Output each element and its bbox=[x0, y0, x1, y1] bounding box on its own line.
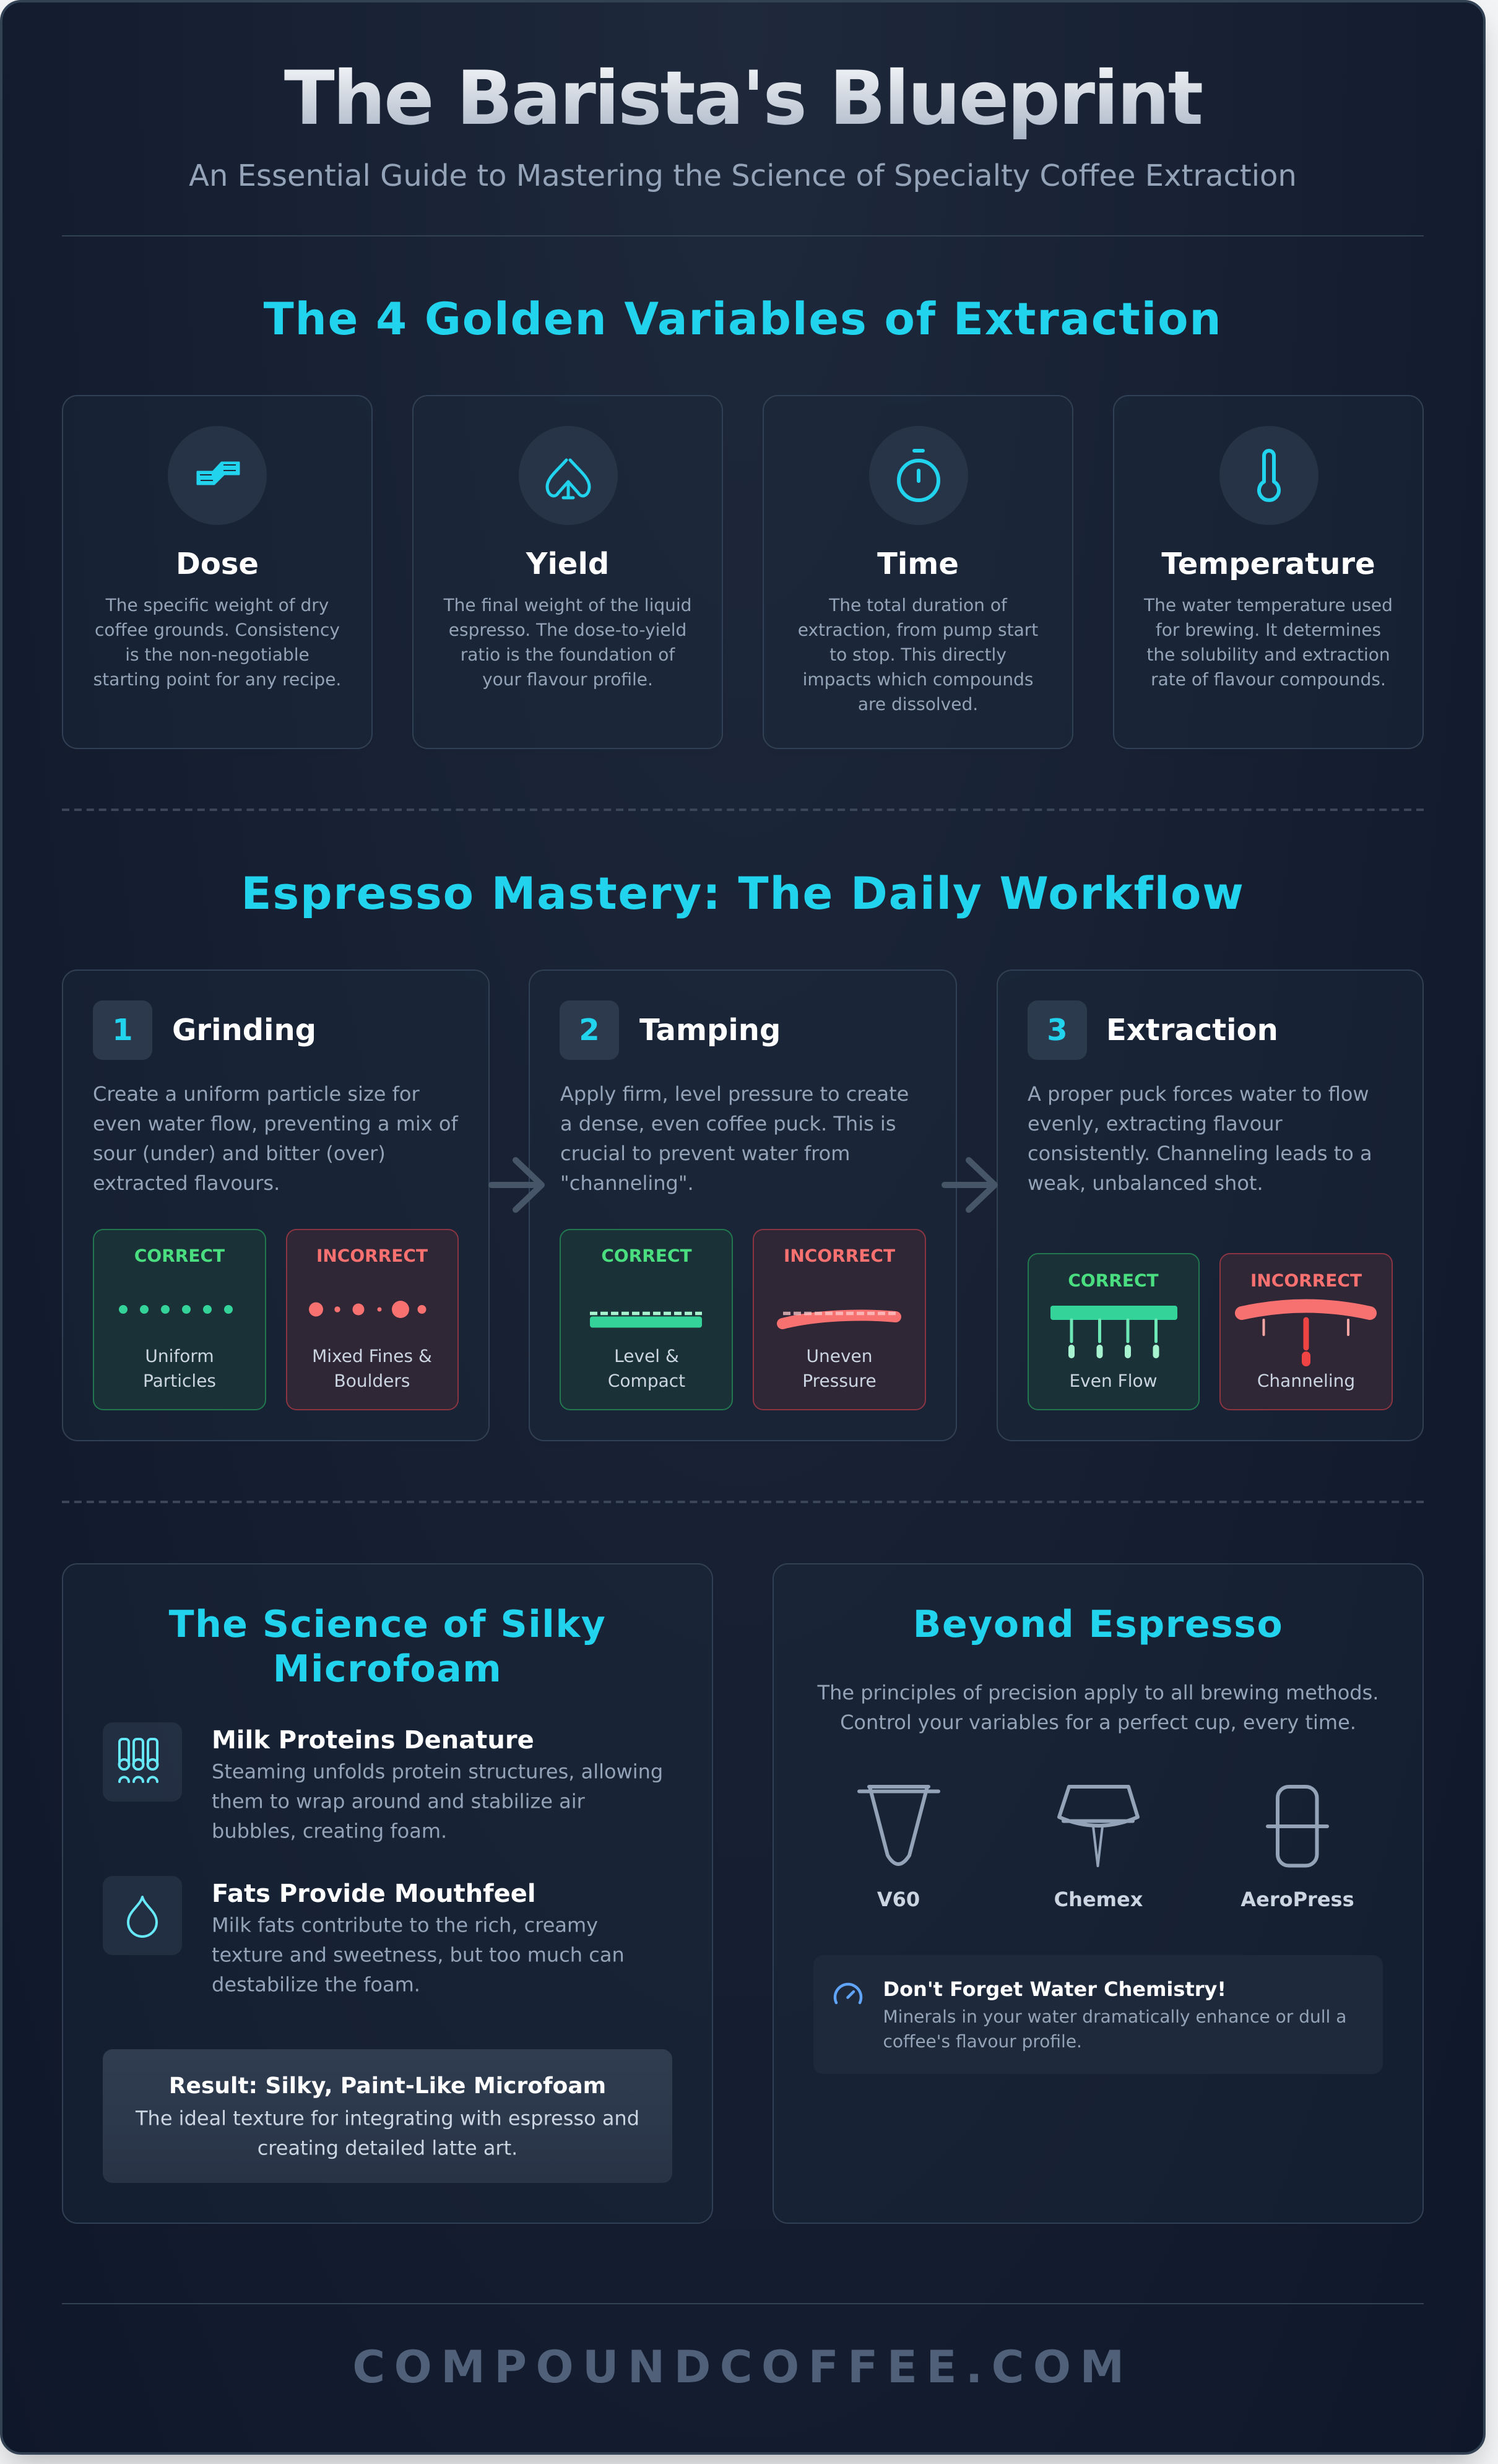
icon: stopwatch bbox=[899, 451, 938, 500]
panel: step 2 tamping bbox=[529, 970, 956, 1441]
text: grinding description: extracted flavours. bbox=[93, 1171, 280, 1195]
item: milk fats: Milk fats contribute to the rich, creamy bbox=[212, 1913, 598, 1937]
icon: Chemex bbox=[1054, 1787, 1143, 1911]
correct: uniform particles: CORRECT bbox=[134, 1246, 225, 1266]
correct: uniform particles: Particles bbox=[143, 1371, 216, 1391]
correct: level and compact: Compact bbox=[608, 1371, 685, 1391]
text: tamping description: crucial to prevent water from bbox=[560, 1142, 850, 1165]
item: milk fats: destabilize the foam. bbox=[212, 1972, 420, 1996]
icon: V60 bbox=[859, 1787, 938, 1911]
incorrect: channeling: INCORRECT bbox=[1250, 1270, 1362, 1291]
panel: step 1 grinding: 1 bbox=[112, 1013, 133, 1048]
correct: level and compact: CORRECT bbox=[601, 1246, 692, 1266]
correct: even flow: Even Flow bbox=[1069, 1371, 1158, 1391]
incorrect: uneven pressure: Uneven bbox=[806, 1346, 873, 1366]
callout: result: Result: Silky, Paint-Like Microfoam bbox=[169, 2073, 606, 2099]
text: time description: extraction, from pump start bbox=[798, 620, 1038, 640]
heading: science of silky microfoam: Microfoam bbox=[273, 1647, 502, 1691]
incorrect: mixed fines and boulders: Mixed Fines & bbox=[312, 1346, 432, 1366]
incorrect: channeling: Channeling bbox=[1257, 1371, 1355, 1391]
item: milk proteins bbox=[103, 1722, 663, 1842]
panel: dose bbox=[63, 396, 372, 748]
callout: result: The ideal texture for integrating with espresso and bbox=[135, 2106, 639, 2130]
text: temperature description: the solubility and extraction bbox=[1146, 644, 1390, 665]
item: milk fats bbox=[103, 1876, 625, 1996]
callout: result: creating detailed latte art. bbox=[258, 2136, 517, 2159]
correct: even flow: CORRECT bbox=[1068, 1270, 1159, 1291]
item: milk proteins: them to wrap around and stabilize air bbox=[212, 1789, 586, 1813]
panel: step 3 extraction: 3 bbox=[1047, 1013, 1068, 1048]
label: time: Time bbox=[877, 547, 959, 581]
panel: beyond espresso bbox=[773, 1564, 1423, 2223]
item: milk proteins: Milk Proteins Denature bbox=[212, 1726, 534, 1755]
heading: science of silky microfoam: The Science of Silky bbox=[169, 1603, 606, 1646]
text: extraction description: weak, unbalanced shot. bbox=[1028, 1171, 1263, 1195]
incorrect: uneven pressure: Pressure bbox=[802, 1371, 877, 1391]
icon: AeroPress: AeroPress bbox=[1240, 1888, 1354, 1911]
incorrect: uneven pressure: INCORRECT bbox=[784, 1246, 895, 1266]
arrow: tamping to extraction bbox=[945, 1160, 995, 1210]
title: The Barista's Blueprint bbox=[284, 56, 1202, 142]
text: extraction description: consistently. Channeling leads to a bbox=[1028, 1142, 1372, 1165]
text: yield description: The final weight of the liquid bbox=[443, 595, 691, 615]
callout: water chemistry: coffee's flavour profile. bbox=[883, 2031, 1082, 2052]
heading: grinding: Grinding bbox=[172, 1013, 316, 1048]
icon: thermometer bbox=[1259, 451, 1279, 500]
item: milk proteins: Steaming unfolds protein structures, allowing bbox=[212, 1759, 663, 1783]
text: grinding description: even water flow, preventing a mix of bbox=[93, 1112, 458, 1135]
text: brewing intro: Control your variables for a perfect cup, every time. bbox=[840, 1711, 1356, 1734]
incorrect: uneven pressure bbox=[753, 1230, 925, 1410]
text: dose description: The specific weight of dry bbox=[105, 595, 329, 615]
text: yield description: your flavour profile. bbox=[482, 669, 653, 690]
panel: temperature bbox=[1114, 396, 1423, 748]
text: temperature description: The water temperature used bbox=[1143, 595, 1393, 615]
callout: result bbox=[103, 2049, 672, 2183]
text: time description: are dissolved. bbox=[858, 694, 978, 714]
panel: yield bbox=[413, 396, 722, 748]
icon: Chemex: Chemex bbox=[1054, 1888, 1143, 1911]
heading: espresso mastery: Espresso Mastery: The Daily Workflow bbox=[241, 867, 1245, 919]
panel: step 2 tamping: 2 bbox=[579, 1013, 600, 1048]
text: tamping description: a dense, even coffee puck. This is bbox=[560, 1112, 896, 1135]
arrow: grinding to tamping bbox=[491, 1160, 542, 1210]
incorrect: mixed fines and boulders: Boulders bbox=[334, 1371, 410, 1391]
label: temperature: Temperature bbox=[1161, 547, 1375, 581]
icon: yield bbox=[547, 460, 589, 498]
panel: step 3 extraction bbox=[997, 970, 1423, 1441]
icon: V60: V60 bbox=[877, 1888, 920, 1911]
incorrect: channeling bbox=[1220, 1254, 1392, 1410]
text: temperature description: rate of flavour compounds. bbox=[1151, 669, 1386, 690]
text: yield description: ratio is the foundation of bbox=[461, 644, 675, 665]
text: brewing intro: The principles of precision apply to all brewing methods. bbox=[817, 1681, 1379, 1704]
text: yield description: espresso. The dose-to-yield bbox=[449, 620, 686, 640]
callout: water chemistry: Don't Forget Water Chemistry! bbox=[883, 1977, 1226, 2001]
item: milk proteins: bubbles, creating foam. bbox=[212, 1819, 447, 1842]
callout: water chemistry: Minerals in your water dramatically enhance or dull a bbox=[883, 2006, 1346, 2027]
correct: level and compact: Level & bbox=[614, 1346, 679, 1366]
correct: even flow bbox=[1028, 1254, 1199, 1410]
item: milk fats: texture and sweetness, but too much can bbox=[212, 1943, 625, 1966]
text: dose description: coffee grounds. Consistency bbox=[95, 620, 340, 640]
heading: extraction: Extraction bbox=[1106, 1013, 1278, 1048]
icon: gauge bbox=[835, 1984, 861, 2003]
text: extraction description: evenly, extracting flavour bbox=[1028, 1112, 1283, 1135]
correct: uniform particles bbox=[93, 1230, 266, 1410]
label: dose: Dose bbox=[176, 547, 259, 581]
icon: dose bbox=[197, 462, 239, 484]
text: extraction description: A proper puck forces water to flow bbox=[1028, 1082, 1369, 1106]
correct: level and compact bbox=[560, 1230, 732, 1410]
subtitle: An Essential Guide to Mastering the Science of Specialty Coffee Extraction bbox=[189, 158, 1297, 193]
text: tamping description: "channeling". bbox=[560, 1171, 694, 1195]
heading: tamping: Tamping bbox=[639, 1013, 781, 1048]
panel: microfoam science bbox=[63, 1564, 712, 2223]
text: time description: The total duration of bbox=[828, 595, 1008, 615]
label: yield: Yield bbox=[526, 547, 609, 581]
panel: time bbox=[763, 396, 1073, 748]
panel: step 1 grinding bbox=[63, 970, 489, 1441]
text: time description: impacts which compounds bbox=[803, 669, 1033, 690]
incorrect: mixed fines and boulders bbox=[287, 1230, 458, 1410]
text: time description: to stop. This directly bbox=[829, 644, 1007, 665]
text: grinding description: Create a uniform particle size for bbox=[93, 1082, 420, 1106]
icon: AeroPress bbox=[1240, 1787, 1354, 1911]
text: dose description: is the non-negotiable bbox=[125, 644, 310, 665]
correct: uniform particles: Uniform bbox=[145, 1346, 214, 1366]
callout: water chemistry bbox=[813, 1955, 1383, 2074]
heading: beyond espresso: Beyond Espresso bbox=[913, 1603, 1283, 1646]
incorrect: mixed fines and boulders: INCORRECT bbox=[316, 1246, 428, 1266]
text: grinding description: sour (under) and bitter (over) bbox=[93, 1142, 386, 1165]
text: dose description: starting point for any recipe. bbox=[93, 669, 341, 690]
heading: the 4 golden variables: The 4 Golden Variables of Extraction bbox=[264, 293, 1222, 345]
text: temperature description: for brewing. It determines bbox=[1156, 620, 1381, 640]
item: milk fats: Fats Provide Mouthfeel bbox=[212, 1880, 536, 1908]
footer brand: COMPOUNDCOFFEE.COM bbox=[352, 2341, 1133, 2393]
text: tamping description: Apply firm, level pressure to create bbox=[560, 1082, 909, 1106]
